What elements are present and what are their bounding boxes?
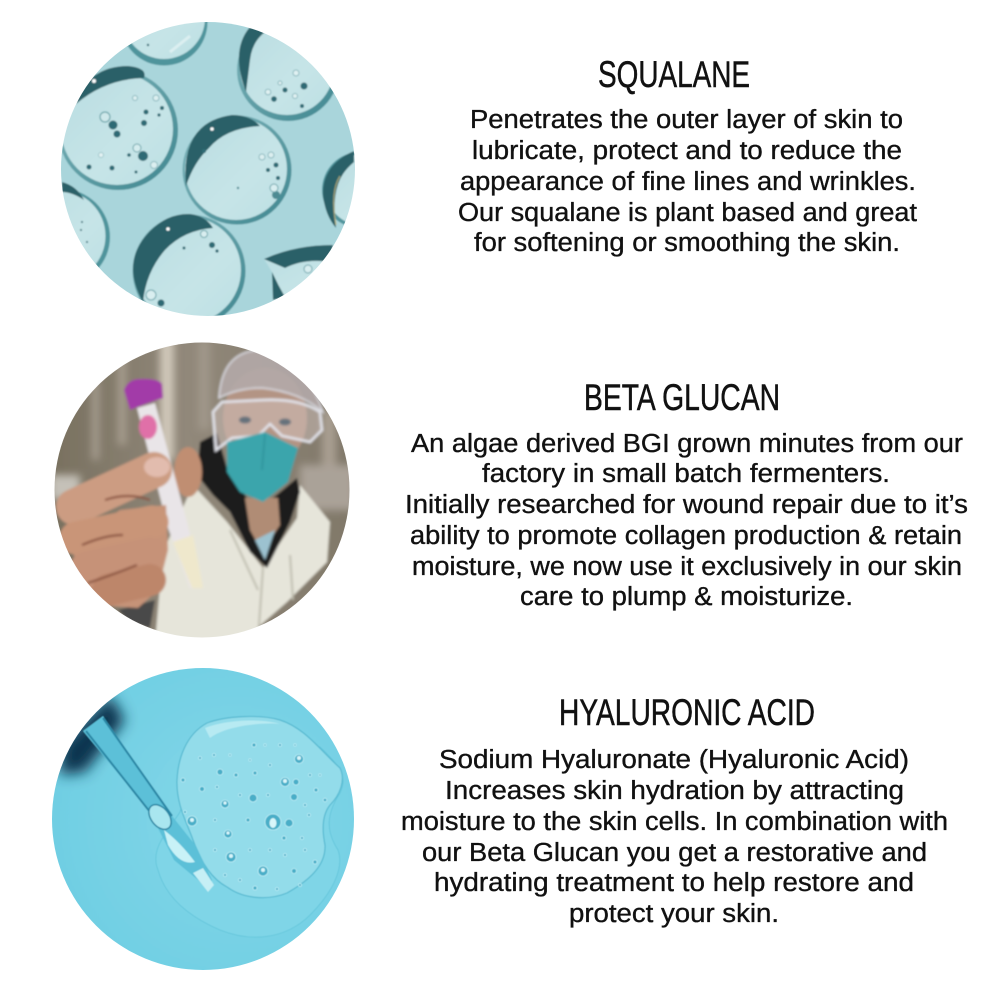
text block: squalane description: Our squalane is plant based and great xyxy=(458,199,917,227)
panel: squalane xyxy=(61,22,917,316)
figure: teal mask xyxy=(227,432,298,502)
heading: squalane: SQUALANE xyxy=(598,54,750,95)
droplet: centre left xyxy=(58,66,178,190)
droplet: top right xyxy=(236,28,334,122)
text block: beta glucan description: Initially researched for wound repair due to it’s xyxy=(405,491,968,519)
figure: neck and shirt xyxy=(245,498,280,552)
pipette shadow xyxy=(60,695,125,775)
text block: squalane description xyxy=(458,106,917,257)
droplet: bottom centre xyxy=(132,214,246,328)
text block: squalane description: lubricate, protect and to reduce the xyxy=(472,137,902,165)
image: scientist holding test tube circle xyxy=(50,338,355,643)
figure: hairnet xyxy=(219,350,323,412)
text block: squalane description: for softening or smoothing the skin. xyxy=(474,229,900,257)
text block: beta glucan description: moisture, we now use it exclusively in our skin xyxy=(412,553,962,581)
droplet: top xyxy=(127,22,208,66)
figure: hand xyxy=(70,457,170,608)
heading: hyaluronic acid: HYALURONIC ACID xyxy=(559,692,815,733)
droplet: wedge xyxy=(264,244,334,300)
panel: hyaluronic acid xyxy=(50,665,948,975)
droplet: right xyxy=(321,150,355,228)
text block: beta glucan description xyxy=(405,430,968,611)
droplet: centre xyxy=(182,115,292,224)
droplet: left xyxy=(62,182,111,268)
text block: beta glucan description: An algae derived BGI grown minutes from our xyxy=(411,430,964,458)
text block: hyaluronic acid description: Increases skin hydration by attracting xyxy=(445,777,904,805)
figure: head xyxy=(222,388,308,449)
pipette xyxy=(83,716,214,892)
text block: hyaluronic acid description xyxy=(401,746,948,928)
text block: hyaluronic acid description: hydrating treatment to help restore and xyxy=(434,869,914,897)
image: serum pipette circle xyxy=(50,665,360,975)
bubble highlights xyxy=(190,756,301,872)
text block: hyaluronic acid description: our Beta Glucan you get a restorative and xyxy=(422,839,927,867)
figure: thumb xyxy=(174,447,202,497)
text block: hyaluronic acid description: Sodium Hyaluronate (Hyaluronic Acid) xyxy=(439,746,909,774)
panel: beta glucan xyxy=(50,338,968,643)
figure: dark sleeve xyxy=(118,600,155,628)
image: gel droplets circle xyxy=(61,22,355,316)
text block: beta glucan description: ability to promote collagen production & retain xyxy=(410,522,962,550)
figure: lab coat xyxy=(155,485,330,643)
text block: hyaluronic acid description: moisture to the skin cells. In combination with xyxy=(401,808,948,836)
figure: goggles xyxy=(213,400,322,450)
figure: test tube xyxy=(124,379,203,588)
text block: beta glucan description: care to plump & moisturize. xyxy=(520,583,853,611)
text block: hyaluronic acid description: protect your skin. xyxy=(569,900,779,928)
bubbles xyxy=(181,743,327,890)
heading: beta glucan: BETA GLUCAN xyxy=(584,377,780,418)
figure: black hood xyxy=(197,433,300,568)
outer serum film xyxy=(156,747,344,938)
text block: beta glucan description: factory in small batch fermenters. xyxy=(482,460,890,488)
text block: squalane description: Penetrates the outer layer of skin to xyxy=(470,106,903,134)
text block: squalane description: appearance of fine lines and wrinkles. xyxy=(460,168,916,196)
serum gel xyxy=(177,716,342,898)
